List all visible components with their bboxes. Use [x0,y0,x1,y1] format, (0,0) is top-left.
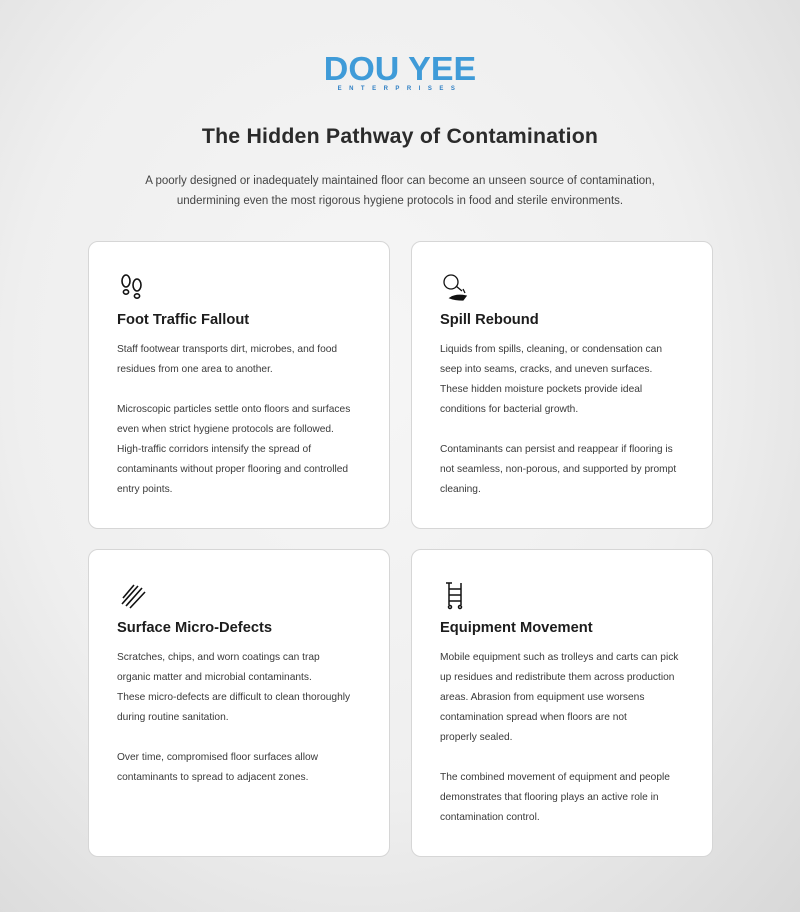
subtitle [145,175,655,206]
text: during routine sanitation. [117,712,229,723]
icon: footprints [121,274,142,299]
text: areas. Abrasion from equipment use worsens [440,692,644,703]
subtitle: undermining even the most rigorous hygiene protocols in food and sterile environments. [177,194,623,206]
text: entry points. [117,484,172,495]
text: conditions for bacterial growth. [440,404,578,415]
text: even when strict hygiene protocols are followed. [117,424,334,435]
text: contamination spread when floors are not [440,712,627,723]
text: Contaminants can persist and reappear if flooring is [440,444,673,455]
title: The Hidden Pathway of Contamination [202,124,598,148]
text: Over time, compromised floor surfaces allow [117,752,318,763]
text: Staff footwear transports dirt, microbes, and food [117,344,337,355]
text: seep into seams, cracks, and uneven surfaces. [440,364,652,375]
text: High-traffic corridors intensify the spread of [117,444,311,455]
text: not seamless, non-porous, and supported by prompt [440,464,676,475]
subtitle: A poorly designed or inadequately maintained floor can become an unseen source of contamination, [145,175,655,187]
icon: trolley [446,582,462,610]
text: contaminants without proper flooring and controlled [117,464,348,475]
text [440,344,676,495]
panel: equipment [411,549,713,857]
text: organic matter and microbial contaminants. [117,672,312,683]
icon: scratches [122,584,146,608]
text: residues from one area to another. [117,364,273,375]
text: The combined movement of equipment and people [440,772,670,783]
text: Scratches, chips, and worn coatings can trap [117,652,320,663]
text: up residues and redistribute them across production [440,672,674,683]
text: contamination control. [440,812,540,823]
panel: foot traffic [88,241,390,529]
text: cleaning. [440,484,481,495]
text: contaminants to spread to adjacent zones. [117,772,308,783]
text: These micro-defects are difficult to clean thoroughly [117,692,350,703]
text: Mobile equipment such as trolleys and carts can pick [440,652,678,663]
panel: spill [411,241,713,529]
logo: DOU YEE [324,50,476,87]
heading: Spill Rebound [440,312,539,328]
text: demonstrates that flooring plays an active role in [440,792,659,803]
heading: Equipment Movement [440,620,593,636]
text [117,652,350,783]
panel: micro-defects [88,549,390,857]
text: Microscopic particles settle onto floors and surfaces [117,404,350,415]
text: Liquids from spills, cleaning, or condensation can [440,344,662,355]
text [440,652,678,823]
text [117,344,350,495]
text: properly sealed. [440,732,512,743]
heading: Foot Traffic Fallout [117,312,249,328]
icon: spill [443,274,468,301]
heading: Surface Micro-Defects [117,620,272,636]
text: These hidden moisture pockets provide ideal [440,384,642,395]
logo: ENTERPRISES [338,86,462,92]
